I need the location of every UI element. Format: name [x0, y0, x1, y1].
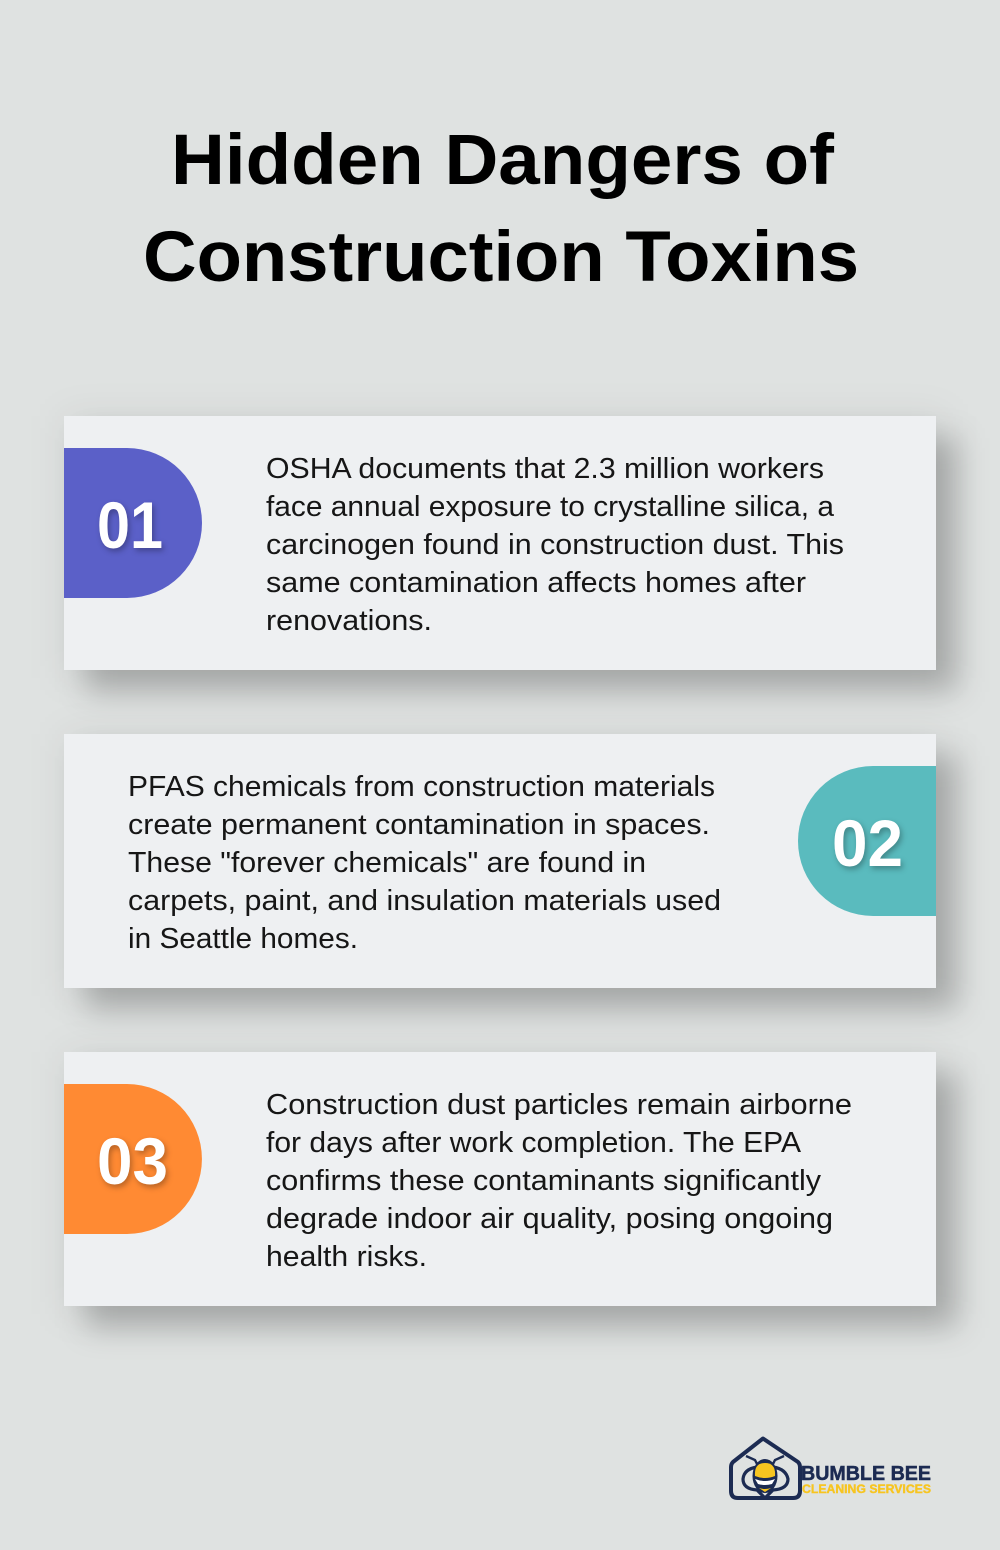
badge: 02: [798, 766, 936, 916]
text block: card 02: These "forever chemicals" are found in: [128, 847, 646, 879]
text block: card 03: health risks.: [266, 1241, 427, 1273]
logo wordmark: CLEANING SERVICES: [802, 1482, 931, 1496]
panel: card 03 airborne dust: [64, 1052, 958, 1328]
badge: 02: 02: [832, 806, 903, 880]
text block: card 03: Construction dust particles remain airborne: [266, 1089, 852, 1121]
title: Construction Toxins: [143, 218, 859, 297]
text block: card 02: [128, 771, 721, 955]
panel: card 02 PFAS chemicals: [64, 734, 958, 1010]
logo: Bumble Bee Cleaning Services: [731, 1438, 931, 1498]
icon: house with bee: [731, 1438, 800, 1498]
text block: card 01: renovations.: [266, 605, 432, 637]
title: Hidden Dangers of: [171, 121, 834, 200]
title: [143, 121, 859, 297]
badge: 03: 03: [97, 1124, 168, 1198]
text block: card 01: carcinogen found in construction dust. This: [266, 529, 844, 561]
text block: card 02: carpets, paint, and insulation materials used: [128, 885, 721, 917]
text block: card 02: PFAS chemicals from construction materials: [128, 771, 715, 803]
text block: card 03: degrade indoor air quality, posing ongoing: [266, 1203, 833, 1235]
text block: card 03: [266, 1089, 852, 1273]
text block: card 01: OSHA documents that 2.3 million workers: [266, 453, 824, 485]
text block: card 03: confirms these contaminants significantly: [266, 1165, 822, 1197]
text block: card 02: create permanent contamination in spaces.: [128, 809, 710, 841]
text block: card 03: for days after work completion. The EPA: [266, 1127, 802, 1159]
badge: 01: 01: [97, 488, 163, 562]
text block: card 01: same contamination affects homes after: [266, 567, 806, 599]
panel: card 01 silica exposure: [64, 416, 958, 692]
badge: 01: [64, 448, 202, 598]
text block: card 01: face annual exposure to crystalline silica, a: [266, 491, 835, 523]
text block: card 01: [266, 453, 844, 637]
text block: card 02: in Seattle homes.: [128, 923, 358, 955]
logo wordmark: [801, 1463, 931, 1496]
logo wordmark: BUMBLE BEE: [801, 1463, 931, 1485]
badge: 03: [64, 1084, 202, 1234]
